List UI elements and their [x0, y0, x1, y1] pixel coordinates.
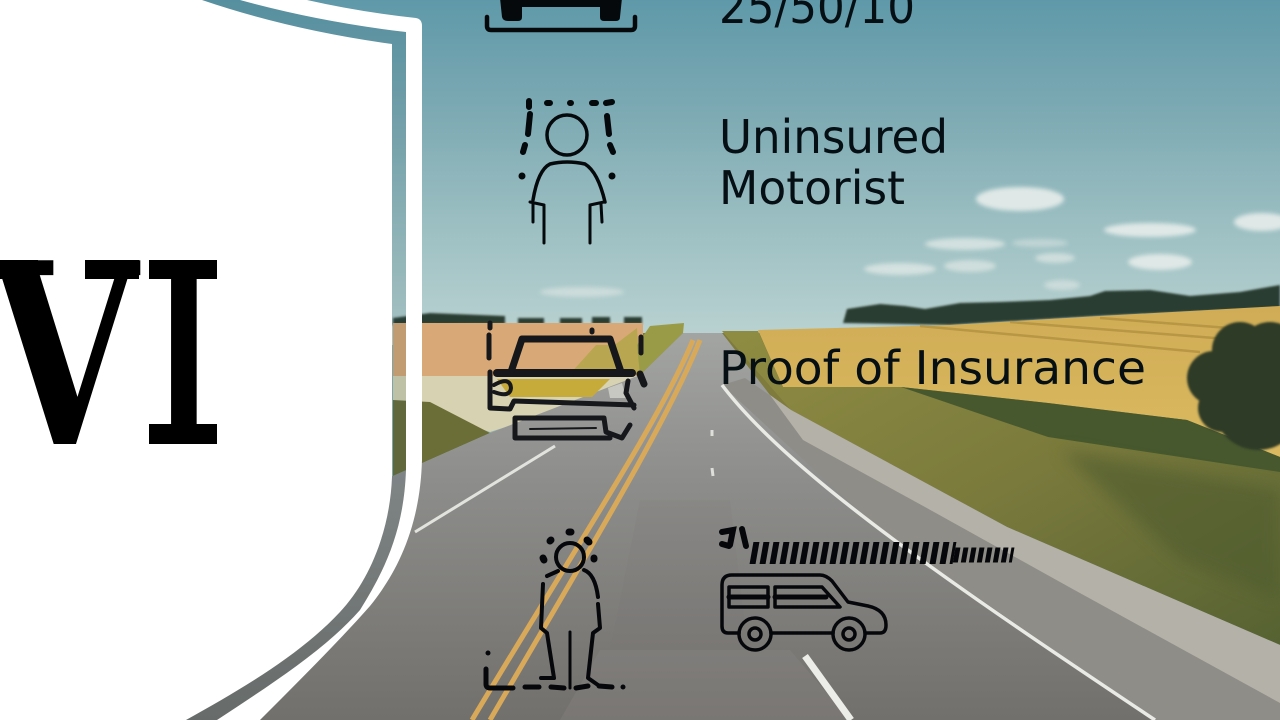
left fields [393, 323, 643, 377]
shield inner panel [0, 0, 392, 720]
icon: car with proof of insurance [489, 323, 644, 438]
shield title: VI: I [152, 208, 216, 504]
shield badge [0, 0, 422, 720]
text: Proof of Insurance: Proof of Insurance [719, 341, 1146, 395]
road surface [0, 333, 1280, 720]
garbled label scribble [722, 529, 1013, 555]
shield band overlay [186, 0, 406, 720]
icon: standing person with dashed frame [486, 532, 623, 688]
shield outer outline [217, 0, 422, 720]
van [722, 575, 886, 650]
text: Uninsured Motorist: Motorist [719, 161, 905, 215]
text: Uninsured Motorist: Uninsured [719, 110, 948, 164]
right tree [1187, 322, 1280, 450]
tree lines [393, 285, 1280, 325]
icon: car with liability limits [487, 0, 635, 30]
icon: van with garbled label [722, 529, 1013, 650]
road markings [415, 340, 1155, 720]
car body artifacts [497, 379, 610, 397]
shield title: VI [0, 208, 217, 504]
text: Uninsured Motorist [719, 110, 948, 215]
icon: uninsured motorist person [522, 101, 613, 243]
right field and grass [758, 306, 1280, 470]
